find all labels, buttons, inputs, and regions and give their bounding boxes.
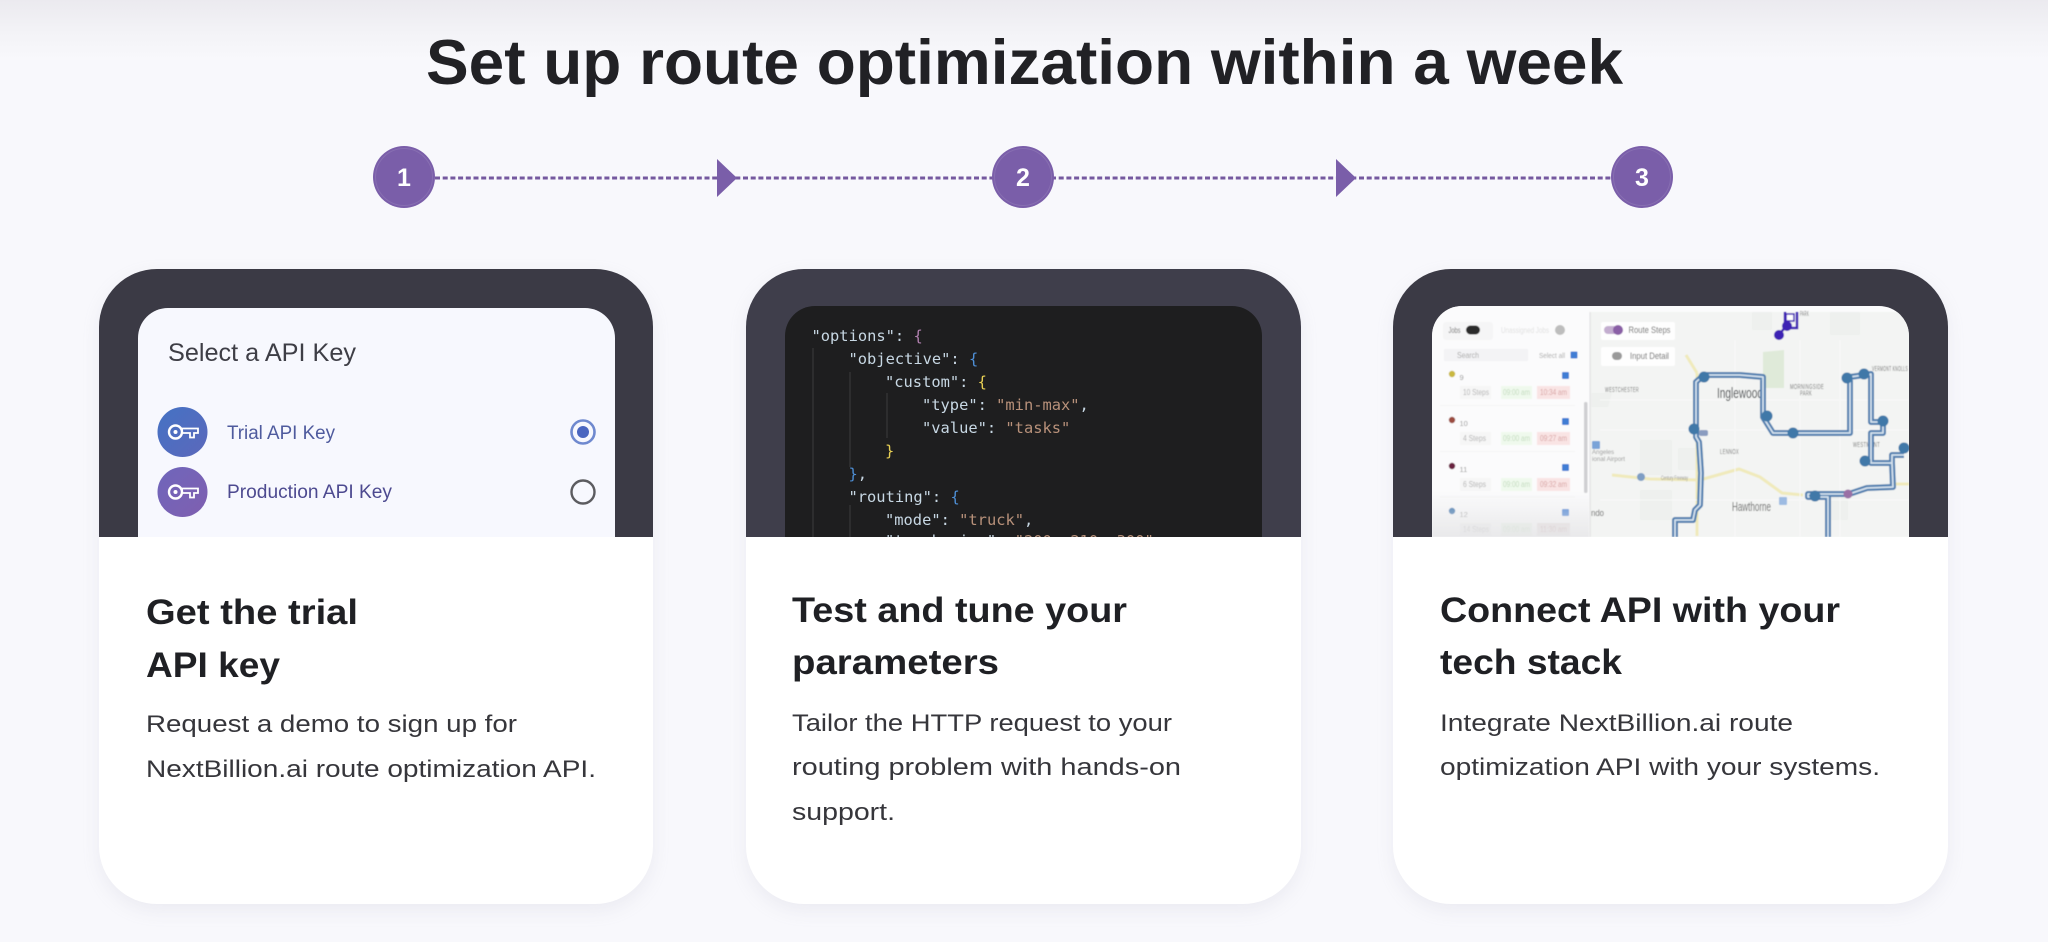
map toggle: route steps — [1601, 322, 1675, 340]
screenshot: JSON code editor: "truck_size": "200, 210, 300" — [885, 532, 1154, 550]
map labels: ndo — [1591, 508, 1604, 518]
screenshot: select API key: Select a API Key — [168, 339, 357, 367]
map labels: PARK — [1800, 311, 1809, 318]
panel: step 2 test and tune parameters — [746, 269, 1301, 911]
job row 10: 09:00 am — [1503, 434, 1530, 443]
map labels: LENNOX — [1720, 449, 1739, 456]
route: purple — [1774, 312, 1797, 340]
radio: selected — [572, 420, 594, 444]
job row 9 — [1449, 371, 1570, 399]
screenshot: JSON code editor: "type": "min-max", — [922, 396, 1089, 414]
text: step 3 description — [1440, 710, 1880, 781]
job row 12 — [1449, 508, 1570, 536]
heading: test and tune: Test and tune your — [792, 591, 1127, 630]
screenshot: select API key — [138, 308, 615, 537]
heading: connect API: Connect API with your — [1440, 591, 1840, 630]
map labels: ional Airport — [1592, 456, 1625, 463]
map — [1590, 311, 1910, 537]
text: step 1 description: NextBillion.ai route optimization API. — [146, 756, 596, 783]
step number 3 — [1611, 146, 1673, 208]
screenshot: JSON code editor: }, — [848, 465, 867, 483]
map labels: Angeles — [1592, 449, 1615, 456]
screenshot: JSON code editor: } — [885, 442, 894, 460]
text: step 2 description: routing problem with hands-on — [792, 754, 1181, 781]
text: step 2 description: support. — [792, 799, 895, 826]
map labels: PARK — [1800, 390, 1812, 398]
map labels: Inglewood — [1717, 385, 1763, 402]
map toggle: route steps: Route Steps — [1628, 325, 1671, 335]
step number 2 — [992, 146, 1054, 208]
screenshot: JSON code editor: "value": "tasks" — [922, 419, 1070, 437]
job row 10: 09:27 am — [1540, 434, 1567, 443]
job row 9: 10:34 am — [1540, 388, 1567, 397]
map toggle: input detail — [1601, 347, 1675, 366]
arrow: step 2 to 3 — [1336, 159, 1356, 197]
job row 11: 6 Steps — [1463, 480, 1486, 489]
job row 9: 9 — [1460, 373, 1464, 382]
screenshot: JSON code editor: "custom": { — [885, 373, 987, 391]
step number 2: 2 — [1016, 164, 1030, 192]
map labels: VERMONT KNOLLS — [1872, 366, 1908, 373]
heading: connect API: tech stack — [1440, 643, 1623, 682]
map labels: WESTCHESTER — [1605, 387, 1639, 394]
route: blue — [1675, 374, 1904, 537]
text: step 1 description — [146, 711, 596, 783]
jobs sidebar: Jobs — [1448, 325, 1460, 335]
jobs sidebar: Search — [1457, 351, 1479, 360]
jobs sidebar: Select all — [1539, 353, 1565, 360]
jobs sidebar — [1432, 306, 1589, 537]
map labels: WESTMONT — [1853, 442, 1880, 449]
label: production API key: Production API Key — [227, 482, 392, 503]
step timeline — [373, 146, 1673, 208]
job row 12: 12 — [1460, 510, 1468, 519]
job row 9: 10 Steps — [1463, 388, 1489, 397]
panel: step 1 get the trial API key — [99, 269, 653, 911]
screenshot: JSON code editor: "mode": "truck", — [885, 511, 1033, 529]
job row 11: 09:00 am — [1503, 480, 1530, 489]
text: step 3 description: optimization API with your systems. — [1440, 754, 1880, 781]
icon: trial key — [158, 407, 208, 457]
arrow: step 1 to 2 — [717, 159, 737, 197]
job row 12: 11:30 am — [1540, 525, 1567, 534]
heading: get the trial API key: Get the trial — [146, 593, 358, 632]
job row 12: 09:00 am — [1503, 525, 1530, 534]
map labels: Century Freeway — [1661, 475, 1688, 482]
step number 3: 3 — [1635, 164, 1649, 192]
jobs sidebar: Unassigned Jobs — [1501, 326, 1549, 335]
step number 1: 1 — [397, 164, 411, 192]
text: step 1 description: Request a demo to sign up for — [146, 711, 517, 738]
text: step 2 description: Tailor the HTTP request to your — [792, 710, 1172, 737]
screenshot: JSON code editor: "options": { — [812, 327, 923, 345]
panel: step 3 connect API — [1393, 269, 1948, 911]
map labels: MORNINGSIDE — [1790, 384, 1824, 391]
heading: test and tune — [792, 591, 1127, 682]
heading: test and tune: parameters — [792, 643, 999, 682]
text: step 3 description: Integrate NextBillion.ai route — [1440, 710, 1793, 737]
title: Set up route optimization within a week — [426, 28, 1624, 98]
job row 10 — [1449, 417, 1570, 445]
screenshot: JSON code editor: "objective": { — [848, 350, 978, 368]
heading: connect API — [1440, 591, 1840, 682]
screenshot: JSON code editor — [785, 306, 1262, 550]
step number 1 — [373, 146, 435, 208]
map labels: Hawthorne — [1732, 499, 1771, 514]
screenshot: JSON code editor: "routing": { — [848, 488, 960, 506]
job row 11: 09:32 am — [1540, 480, 1567, 489]
map toggle: input detail: Input Detail — [1630, 351, 1669, 361]
job row 12: 14 Steps — [1463, 525, 1489, 534]
job row 9: 09:00 am — [1503, 388, 1530, 397]
text: step 2 description — [792, 710, 1181, 826]
job row 11: 11 — [1460, 465, 1467, 474]
job row 10: 4 Steps — [1463, 434, 1486, 443]
job row 11 — [1449, 463, 1570, 491]
heading: get the trial API key: API key — [146, 646, 281, 685]
heading: get the trial API key — [146, 593, 358, 685]
job row 10: 10 — [1460, 419, 1468, 428]
map labels — [1591, 311, 1908, 518]
route stops: blue — [1688, 368, 1910, 502]
screenshot: route map dashboard — [1432, 306, 1910, 537]
icon: production key — [158, 467, 208, 517]
radio: unselected — [572, 480, 594, 504]
label: trial API key: Trial API Key — [227, 423, 335, 444]
